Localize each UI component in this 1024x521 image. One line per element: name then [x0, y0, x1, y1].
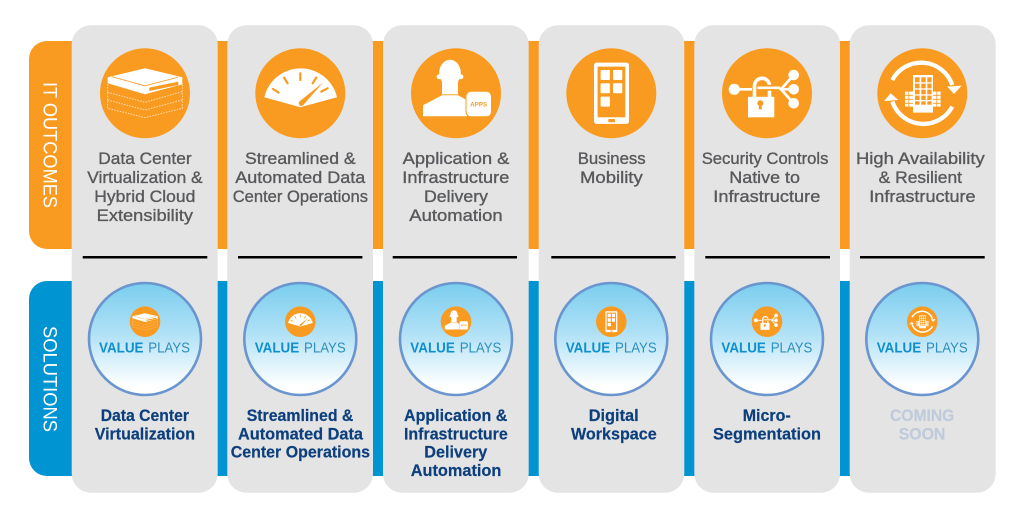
- value plays badge: VALUE: [566, 340, 610, 356]
- solution: data center virtualization: Data Center: [101, 407, 190, 425]
- outcome: security controls: Native to: [729, 168, 800, 187]
- solution: streamlined: Streamlined &: [247, 407, 353, 425]
- icon: mobile device: [566, 48, 656, 138]
- icon: person with apps: [411, 48, 501, 138]
- panel: column 5: [694, 25, 840, 493]
- icon: gauge: [255, 48, 345, 138]
- value plays badge: [555, 283, 667, 395]
- outcome: data center: Data Center: [98, 149, 192, 168]
- outcome: high availability: High Availability: [856, 149, 985, 168]
- label: IT OUTCOMES: IT OUTCOMES: [38, 82, 60, 208]
- outcome: application: Application &: [403, 149, 510, 168]
- outcome: data center: Extensibility: [97, 206, 194, 225]
- panel: column 1: [72, 25, 218, 493]
- solution: application: Infrastructure: [404, 426, 508, 444]
- solution: micro-segmentation: Micro-: [743, 407, 791, 425]
- outcome: high availability: Infrastructure: [869, 187, 976, 206]
- panel: column 4: [539, 25, 684, 493]
- value plays badge: PLAYS: [771, 340, 812, 356]
- outcome: data center: Hybrid Cloud: [94, 187, 195, 206]
- solution: digital workspace: Workspace: [571, 426, 657, 444]
- value plays badge: [89, 283, 201, 395]
- outcome: streamlined: Automated Data: [235, 168, 366, 187]
- outcome: business mobility: Business: [578, 149, 646, 168]
- solution: streamlined: Center Operations: [231, 444, 370, 462]
- icon: server stack: [100, 48, 190, 138]
- solution: coming soon: SOON: [899, 426, 945, 444]
- solution: application: Application &: [404, 407, 507, 425]
- outcome: application: Delivery: [424, 187, 489, 206]
- outcome: data center: Virtualization &: [87, 168, 203, 187]
- solution: application: Automation: [411, 462, 501, 480]
- value plays badge: [400, 283, 512, 395]
- value plays badge: VALUE: [410, 340, 455, 356]
- icon: padlock network: [722, 48, 812, 138]
- panel: column 6: [850, 25, 996, 493]
- value plays badge: PLAYS: [615, 340, 657, 356]
- value plays badge: VALUE: [721, 340, 766, 356]
- solution: data center virtualization: Virtualization: [95, 426, 195, 444]
- value plays badge: PLAYS: [926, 340, 968, 356]
- outcome: security controls: Infrastructure: [713, 187, 820, 206]
- value plays badge: VALUE: [99, 340, 144, 356]
- value plays badge: PLAYS: [148, 340, 190, 356]
- value plays badge: [866, 283, 978, 395]
- solution: streamlined: Automated Data: [238, 426, 364, 444]
- label: SOLUTIONS: SOLUTIONS: [38, 326, 60, 432]
- panel: column 3: [383, 25, 529, 493]
- solution: micro-segmentation: Segmentation: [713, 426, 821, 444]
- outcome: business mobility: Mobility: [580, 168, 643, 187]
- icon: building with cycle arrows: [877, 48, 967, 138]
- solution: application: Delivery: [424, 444, 488, 462]
- value plays badge: PLAYS: [304, 340, 346, 356]
- outcome: high availability: & Resilient: [879, 168, 962, 187]
- solution: coming soon: COMING: [890, 407, 954, 425]
- value plays badge: VALUE: [877, 340, 921, 356]
- outcome: application: Infrastructure: [402, 168, 509, 187]
- outcome: streamlined: Streamlined &: [245, 149, 356, 168]
- outcome: security controls: Security Controls: [702, 149, 828, 168]
- value plays badge: [244, 283, 356, 395]
- value plays badge: PLAYS: [460, 340, 501, 356]
- solution: digital workspace: Digital: [589, 407, 639, 425]
- outcome: application: Automation: [409, 206, 503, 225]
- outcome: streamlined: Center Operations: [233, 187, 368, 206]
- panel: column 2: [227, 25, 373, 493]
- value plays badge: VALUE: [255, 340, 299, 356]
- value plays badge: [711, 283, 823, 395]
